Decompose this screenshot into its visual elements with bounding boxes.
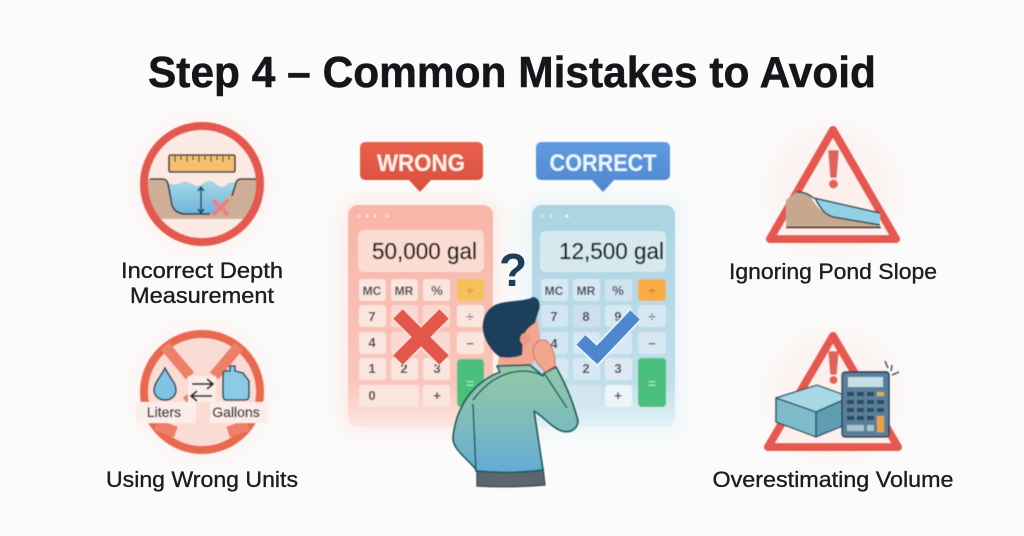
calculator keys: ÷ [466, 283, 474, 298]
label: ignoring pond slope: Ignoring Pond Slope [729, 259, 937, 284]
icon: depth arrow [198, 187, 204, 213]
calculator keys: 4 [368, 335, 376, 350]
label: incorrect depth measurement: Incorrect Depth [121, 258, 283, 283]
hair [483, 297, 540, 358]
calculator keys [359, 279, 484, 407]
panel: wrong calculator [338, 142, 503, 435]
shirt [453, 365, 578, 472]
tank [776, 385, 850, 437]
panel: incorrect depth measurement [121, 112, 283, 283]
label: using wrong units: Using Wrong Units [106, 467, 298, 492]
calculator keys: 7 [368, 309, 376, 324]
slope water [815, 198, 880, 225]
calculator keys: ÷ [648, 283, 656, 298]
mini calculator [842, 372, 889, 437]
exclamation mark [829, 352, 838, 374]
calculator keys: 7 [550, 309, 558, 324]
calculator display: 50,000 gal [372, 238, 477, 264]
infographic canvas [108, 55, 953, 492]
exclamation mark [829, 151, 838, 177]
ear [520, 333, 530, 345]
calculator display: 12,500 gal [559, 238, 664, 264]
icon: blue check [581, 315, 635, 355]
calculator keys: 1 [368, 361, 376, 376]
calculator keys: 4 [550, 336, 558, 351]
panel: overestimating volume [712, 327, 954, 492]
label: overestimating volume: Overestimating Volume [712, 467, 954, 492]
badge: wrong: WRONG [377, 150, 465, 177]
calculator keys: 9 [614, 309, 622, 324]
hand [533, 340, 555, 372]
calculator keys: MR [577, 284, 596, 298]
title: Step 4 – Common Mistakes to Avoid [148, 48, 876, 97]
calculator keys: ÷ [466, 309, 474, 324]
icon: error cross [214, 201, 227, 214]
icon: jug [223, 366, 249, 400]
label: gallons: Gallons [212, 404, 260, 420]
calculator display [540, 231, 666, 272]
pants [477, 468, 545, 487]
calculator keys: MC [545, 284, 564, 298]
neck and face [497, 318, 541, 368]
calculator body [348, 205, 493, 427]
figure: thinking man [453, 297, 578, 487]
calculator keys: % [612, 283, 624, 298]
panel: correct calculator [522, 142, 685, 435]
calculator display [358, 230, 484, 272]
slope soil [786, 192, 880, 227]
icon: warning triangle with tank and calculator [768, 336, 899, 447]
label line two: Measurement [130, 283, 274, 308]
calculator keys: = [466, 376, 474, 391]
calculator keys: 8 [582, 309, 590, 324]
badge: wrong [360, 142, 483, 192]
calculator body [532, 205, 675, 427]
calculator keys: + [614, 388, 622, 403]
icon: red cross [398, 314, 444, 360]
calculator keys: 0 [368, 388, 376, 403]
panel: using wrong units [106, 320, 298, 492]
icon: swap arrows [191, 379, 213, 401]
panel: ignoring pond slope [729, 124, 937, 284]
icon: question mark: ? [499, 244, 527, 296]
icon: warning triangle with slope [770, 130, 896, 239]
label: liters: Liters [147, 404, 181, 420]
calculator keys: % [431, 283, 443, 298]
icon: water drop [154, 368, 176, 400]
calculator keys: + [433, 388, 441, 403]
badge: correct: CORRECT [550, 150, 657, 177]
calculator keys: 2 [400, 361, 408, 376]
calculator keys: = [648, 376, 656, 391]
calculator keys: 3 [614, 361, 622, 376]
icon: ruler [169, 155, 235, 172]
spark lines [885, 361, 899, 375]
calculator keys: − [466, 336, 474, 351]
icon: pond depth in prohibition ring [140, 126, 262, 242]
calculator keys [541, 279, 666, 407]
calculator keys: − [648, 336, 656, 351]
calculator keys: 3 [433, 361, 441, 376]
calculator keys: MR [395, 284, 414, 298]
badge: correct [536, 142, 670, 192]
icon: prohibited unit conversion [136, 334, 268, 450]
calculator keys: MC [363, 284, 382, 298]
calculator keys: ÷ [648, 309, 656, 324]
calculator keys: 2 [582, 361, 590, 376]
